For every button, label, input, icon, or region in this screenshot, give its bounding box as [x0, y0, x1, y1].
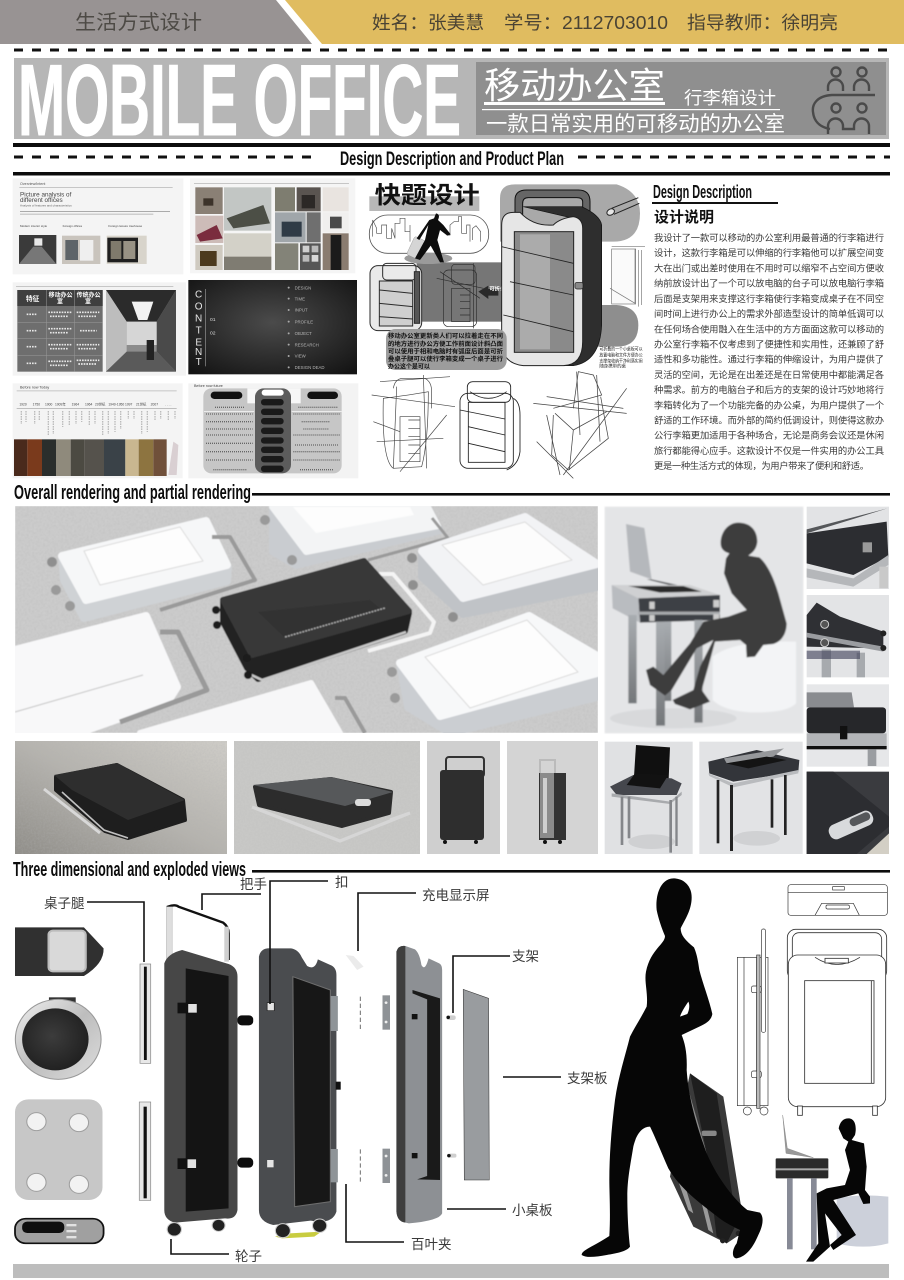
thumbnail: office history timeline: 1900 [45, 403, 53, 407]
header: course tab [0, 0, 312, 44]
description paragraph: 设计，这款行李箱是可以伸缩的行李箱他可以扩展空间变 [654, 247, 884, 258]
icon: meeting people [813, 68, 875, 134]
scale figures and drawings [582, 878, 888, 1262]
wireframe sketch right [533, 372, 627, 478]
small desk scene [776, 1115, 888, 1262]
label: bracket: 支架 [512, 949, 539, 964]
render: upright side [507, 741, 598, 854]
carried suitcase [670, 1073, 747, 1243]
thumbnail: contents page: 01 [210, 317, 216, 323]
detail: latch [807, 684, 889, 767]
gray backdrop top right [500, 184, 640, 242]
description paragraph: 后面是支架用来支撑这行李箱使行李箱变成桌子在不同空 [654, 293, 884, 304]
comparison table: 室 [57, 298, 63, 306]
label: bracket board: 支架板 [567, 1071, 608, 1086]
thumbnail: contents page: N [195, 314, 202, 325]
white suitcase top center [260, 507, 448, 566]
description paragraph: 种需求。前方的电脑台子和后方的支架的设计巧妙地将行 [654, 384, 884, 395]
thumbnail: comparison chart: Before now future [194, 384, 223, 388]
thumbnail: office history timeline: 20世纪 [95, 402, 106, 407]
description paragraph: 更是一种生活方式的体现，为用户带来了便利和舒适。 [654, 460, 869, 471]
label: clasp: 扣 [335, 875, 348, 890]
label: louver clip: 百叶夹 [411, 1237, 452, 1252]
detail: desk leg clip [15, 927, 104, 976]
thumbnail: contents page: N [195, 347, 202, 358]
description paragraph: 我设计了一款可以移动的办公室利用最普通的行李箱进行 [654, 232, 884, 243]
thumbnail: office history timeline: 21世纪 [136, 402, 147, 407]
bottom bar [13, 1264, 889, 1278]
description paragraph: 大在出门或出差时使用在不用时可以缩窄不占空间方便收 [654, 262, 884, 274]
callout caption: 的地方进行办公方便工作前面设计斜凸面 [388, 340, 503, 348]
thumbnail: contents page: C [195, 290, 202, 301]
heading text: Overall rendering and partial rendering [14, 482, 251, 504]
detail icons column [15, 927, 104, 1243]
research thumbnails [13, 178, 358, 478]
small handwritten note: 可折叠的一个小桌板可以 [599, 346, 643, 353]
small wireframe suitcase [437, 263, 483, 328]
callout lines [87, 881, 561, 1254]
thumbnail: contents page: T [196, 357, 202, 368]
render: desk with black laptop [605, 742, 693, 854]
callout caption: 可以使用于相和电脑时有弧度后面是可折 [388, 348, 503, 356]
thumbnail: office history timeline: Before now Today [20, 386, 49, 390]
dashed divider top [14, 48, 890, 52]
banner background [14, 58, 889, 139]
top view drawing [788, 885, 887, 915]
description paragraph: 舒适的工作环境。而外部的简约低调设计，则使得这款办 [654, 414, 884, 426]
upper rule [13, 143, 890, 147]
callout caption: 叠桌子腿可以使行李箱变成一个桌子进行 [388, 355, 503, 363]
part: bracket board [463, 989, 489, 1180]
thumbnail: comparison chart [188, 383, 358, 478]
heading text: Three dimensional and exploded views [13, 858, 246, 881]
author name: 姓名：张美慧 [372, 13, 484, 33]
heading rule [252, 493, 890, 496]
thumbnail: contents page: OBJECT [295, 331, 312, 336]
render: upright back [427, 741, 500, 854]
small handwritten note: 随身携带的桌 [599, 363, 627, 370]
thumbnail: office history timeline: 1940-1950 [108, 403, 124, 407]
description paragraph: 间时间上进行办公上的需求外部造型设计的简单低调可以 [654, 308, 884, 319]
thumbnail: picture analysis: Foreign leisure treehouse [108, 224, 143, 228]
handle detail [606, 198, 639, 217]
label: wheels: 轮子 [235, 1249, 262, 1264]
render: person seated at suitcase desk [605, 507, 803, 733]
thumbnail: picture analysis: Modern interior style [20, 224, 47, 228]
part: brackets pins [446, 1015, 456, 1158]
thumbnail: contents page: T [196, 326, 202, 337]
main title: MOBILE OFFICE [18, 45, 461, 157]
sketch panel [369, 182, 645, 478]
render row: product views [15, 741, 598, 854]
callout caption [386, 329, 507, 370]
thumbnail: contents page: 02 [210, 330, 216, 336]
thumbnail: contents page: TIME [295, 296, 305, 301]
floor [15, 506, 598, 733]
part: charging screen [346, 955, 364, 970]
thumbnail: contents page: DESIGN DEAD [295, 365, 324, 370]
thumbnail: picture analysis [13, 178, 183, 274]
heading rule [252, 870, 890, 873]
thumbnail: contents page: E [195, 338, 202, 349]
thumbnail: photo collage [190, 178, 355, 273]
label: charging display: 充电显示屏 [422, 888, 490, 903]
dashes right [578, 156, 890, 158]
tagline: 一款日常实用的可移动的办公室 [486, 113, 785, 136]
thumbnail: contents page: DESIGN [295, 285, 311, 290]
thumbnail: comparison table and office photo [13, 282, 186, 376]
thumbnail: contents page: RESEARCH [295, 342, 319, 347]
label: handle: 把手 [240, 877, 267, 892]
course name: 生活方式设计 [75, 11, 202, 34]
part: front shell [259, 948, 341, 1238]
white suitcase right [407, 517, 597, 622]
description paragraph [654, 232, 884, 471]
thumbnail: office history timeline: 2007 [151, 403, 158, 407]
lower rule [13, 172, 890, 176]
sketch heading: 快题设计 [375, 182, 480, 208]
render row: desk mode views [605, 742, 803, 854]
callout caption: 移动办公室更新类人们可以拉着走在不同 [388, 332, 503, 340]
floor shadow [610, 708, 737, 728]
hinge detail sketch [610, 247, 645, 307]
walking figure [404, 213, 452, 264]
side view drawing [737, 929, 768, 1115]
thumbnail: office history timeline: 1909年 [55, 402, 66, 407]
description paragraph: 李箱转化为了一个功能完备的办公桌，为用户提供了一个 [654, 399, 884, 410]
description paragraph: 办公室行李箱不仅考虑到了便捷性和实用性，还兼顾了舒 [654, 338, 884, 350]
subtitle box [476, 62, 886, 135]
thumbnail: office history timeline: 1964 [85, 403, 93, 407]
laptop [626, 524, 703, 592]
thumbnail: contents page: INPUT [295, 308, 308, 313]
comparison table: 移动办公 [49, 291, 73, 299]
section heading: Design Description and Product Plan [340, 148, 564, 170]
office photo [106, 290, 176, 372]
render: suitcase on stone, angled [234, 741, 420, 854]
description paragraph: 公行李箱更加适用于各种场合，无论是商务会议还是休闲 [654, 430, 884, 441]
thumbnail: contents page: VIEW [295, 354, 307, 359]
white suitcase lower right [387, 616, 597, 733]
thumbnail: contents page [188, 280, 357, 374]
detail: charging display [807, 772, 889, 854]
description heading english: Design Description [653, 181, 752, 202]
description paragraph: 旅行都能得心应手。这款设计不仅是一件实用的办公工具 [654, 445, 884, 456]
callout label: 可折叠桌子 [489, 284, 517, 292]
detail: wheel [15, 997, 101, 1079]
front view drawing [787, 929, 887, 1115]
chinese title: 移动办公室 [484, 65, 665, 106]
dashes left [14, 156, 320, 158]
thumbnail: office history timeline: 1964 [72, 403, 79, 407]
comparison table: 室 [85, 298, 91, 306]
render: desk with open lid [699, 742, 803, 854]
white suitcase bottom center [140, 683, 365, 733]
description heading chinese: 设计说明 [654, 209, 714, 226]
big suitcase sketch [502, 190, 602, 366]
thumbnail: picture analysis: Overview/Intent [20, 182, 45, 186]
title underline [484, 102, 665, 105]
header bar [0, 0, 904, 44]
small handwritten note: 支撑架收纳干净利落实用 [599, 357, 643, 364]
thumbnail: picture analysis: different offices [20, 197, 63, 204]
desk suitcase [612, 585, 720, 623]
student number: 学号：2112703010 [504, 13, 668, 33]
header: author tab [285, 0, 904, 44]
part: small desk board [396, 946, 442, 1223]
advisor: 指导教师：徐明亮 [687, 13, 838, 33]
label: desk leg: 桌子腿 [44, 896, 85, 911]
part: pull handle [166, 905, 229, 1037]
detail: charging display [15, 1219, 104, 1243]
description paragraph: 在任何场合使用融入在生活中的方方面面这款可以移动的 [654, 323, 884, 334]
desk legs [628, 615, 703, 726]
small suitcase front [370, 263, 422, 331]
heading underline [652, 202, 778, 204]
black suitcase with handle [212, 561, 434, 680]
description paragraph: 灵活的空间，无论是在出差还是在日常使用中都能满足各 [654, 369, 884, 380]
thin underline [482, 109, 780, 110]
description paragraph: 纳前放设计出了一个可以放电脑的台子可以放电脑行李箱 [654, 278, 884, 289]
small handwritten note [599, 346, 643, 370]
callout caption: 办公这个是可以 [388, 362, 430, 370]
seated silhouette [646, 523, 787, 709]
small handwritten note: 放置电脑和文件方便办公 [599, 351, 643, 358]
title banner [14, 45, 889, 157]
thumbnail: office history timeline: . . . . [165, 403, 172, 407]
product type: 行李箱设计 [684, 88, 776, 108]
callout lines and labels [44, 875, 608, 1264]
wireframe sketch left [372, 375, 455, 472]
thumbnail: contents page: O [195, 302, 203, 313]
thumbnail: office history timeline: 1750 [33, 403, 40, 407]
thumbnail: contents page: PROFILE [295, 319, 313, 324]
wireframe sketch center [460, 382, 520, 470]
city skyline vignette [369, 215, 489, 253]
detail: wheels [807, 595, 889, 677]
part: rear shell [164, 950, 253, 1236]
white suitcase lower left [15, 616, 207, 733]
part: louver clips [360, 995, 390, 1183]
detail: opened lid [807, 507, 889, 589]
section rule: design description [13, 143, 890, 176]
thumbnail: picture analysis: Picture analysis of [20, 191, 72, 198]
detail: silver plate [15, 1099, 102, 1200]
description paragraph: 适性和多功能性。通过行李箱的伸缩设计，为用户提供了 [654, 354, 884, 365]
sketch heading band [369, 196, 479, 211]
thumbnail: office history timeline: 1997 [125, 403, 133, 407]
thumbnail: picture analysis: Foreign offices [63, 224, 83, 228]
render: suitcase on stone, black [15, 741, 227, 854]
thumbnail: picture analysis: Analysis of features and characteristics [20, 203, 72, 207]
walking silhouette [582, 878, 763, 1258]
label: small desk board: 小桌板 [512, 1203, 553, 1218]
stool [713, 642, 796, 712]
thumbnail: office history timeline: 1920 [19, 403, 27, 407]
white suitcase upper left [47, 521, 255, 618]
comparison table [17, 290, 103, 372]
exploded view parts [139, 905, 489, 1238]
comparison table: 特征 [26, 294, 40, 303]
gray backdrop bottom right [593, 305, 638, 347]
comparison table: 传统办公 [77, 291, 101, 299]
callout arrow [478, 286, 498, 299]
design description column [652, 181, 884, 471]
thumbnail: office history timeline [13, 383, 183, 478]
gray backdrop middle [417, 262, 510, 322]
render: detail crops column [807, 507, 889, 854]
part: desk legs [139, 964, 151, 1200]
image background [605, 507, 803, 733]
main render: suitcases on floor [15, 506, 598, 733]
